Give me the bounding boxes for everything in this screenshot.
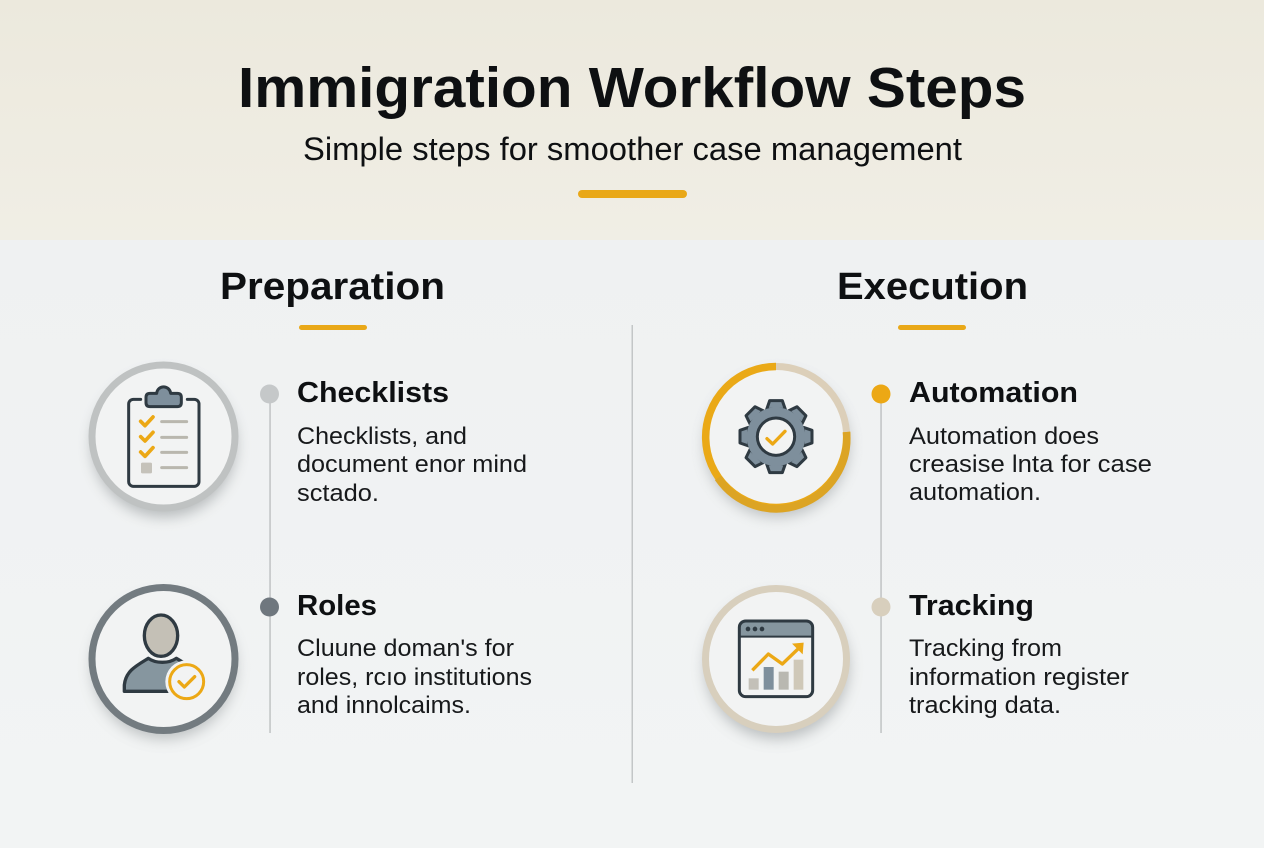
execution timeline line — [880, 394, 882, 733]
timeline dot: automation — [872, 384, 890, 404]
step text: automation: Automation does — [909, 423, 1099, 450]
heading: preparation: Preparation — [220, 266, 445, 308]
step: checklists — [297, 377, 527, 507]
icon: gear with check badge — [705, 366, 849, 517]
step text: roles: and innolcaims. — [297, 692, 471, 719]
step text: automation: automation. — [909, 479, 1041, 506]
timeline dot: roles — [260, 598, 279, 616]
panel: header band — [0, 0, 1264, 240]
heading: execution: Execution — [837, 266, 1028, 308]
panel: content background — [0, 240, 1264, 848]
step text: checklists: sctado. — [297, 480, 379, 507]
step heading: automation: Automation — [909, 377, 1078, 409]
preparation timeline line — [269, 394, 271, 733]
step text: checklists: document enor mind — [297, 451, 527, 478]
icon: tracking dashboard — [705, 588, 849, 739]
icon: person with check badge — [92, 588, 236, 739]
step text: tracking: tracking data. — [909, 692, 1061, 719]
step text: roles — [297, 635, 532, 719]
center divider — [632, 325, 633, 783]
step text: automation: creasise lnta for case — [909, 451, 1152, 478]
step text: tracking: information register — [909, 664, 1129, 691]
panel: preparation — [92, 266, 532, 739]
timeline dot: tracking — [872, 598, 890, 616]
preparation accent bar — [299, 325, 367, 330]
step: tracking — [909, 590, 1129, 719]
step: roles — [297, 590, 532, 719]
title: Immigration Workflow Steps — [238, 56, 1026, 120]
step text: roles: Cluune doman's for — [297, 635, 514, 662]
execution accent bar — [898, 325, 966, 330]
subtitle: Simple steps for smoother case management — [303, 131, 962, 167]
step text: automation — [909, 423, 1152, 506]
step text: checklists — [297, 423, 527, 507]
step heading: tracking: Tracking — [909, 590, 1034, 622]
header accent bar — [578, 190, 687, 198]
step heading: checklists: Checklists — [297, 377, 449, 409]
icon: checklist clipboard badge — [92, 365, 236, 517]
step text: checklists: Checklists, and — [297, 423, 467, 450]
panel: execution — [705, 266, 1152, 739]
step text: roles: roles, rcıo institutions — [297, 664, 532, 691]
timeline dot: checklists — [260, 384, 279, 404]
step text: tracking: Tracking from — [909, 635, 1062, 662]
step: automation — [909, 377, 1152, 506]
step heading: roles: Roles — [297, 590, 377, 622]
step text: tracking — [909, 635, 1129, 719]
